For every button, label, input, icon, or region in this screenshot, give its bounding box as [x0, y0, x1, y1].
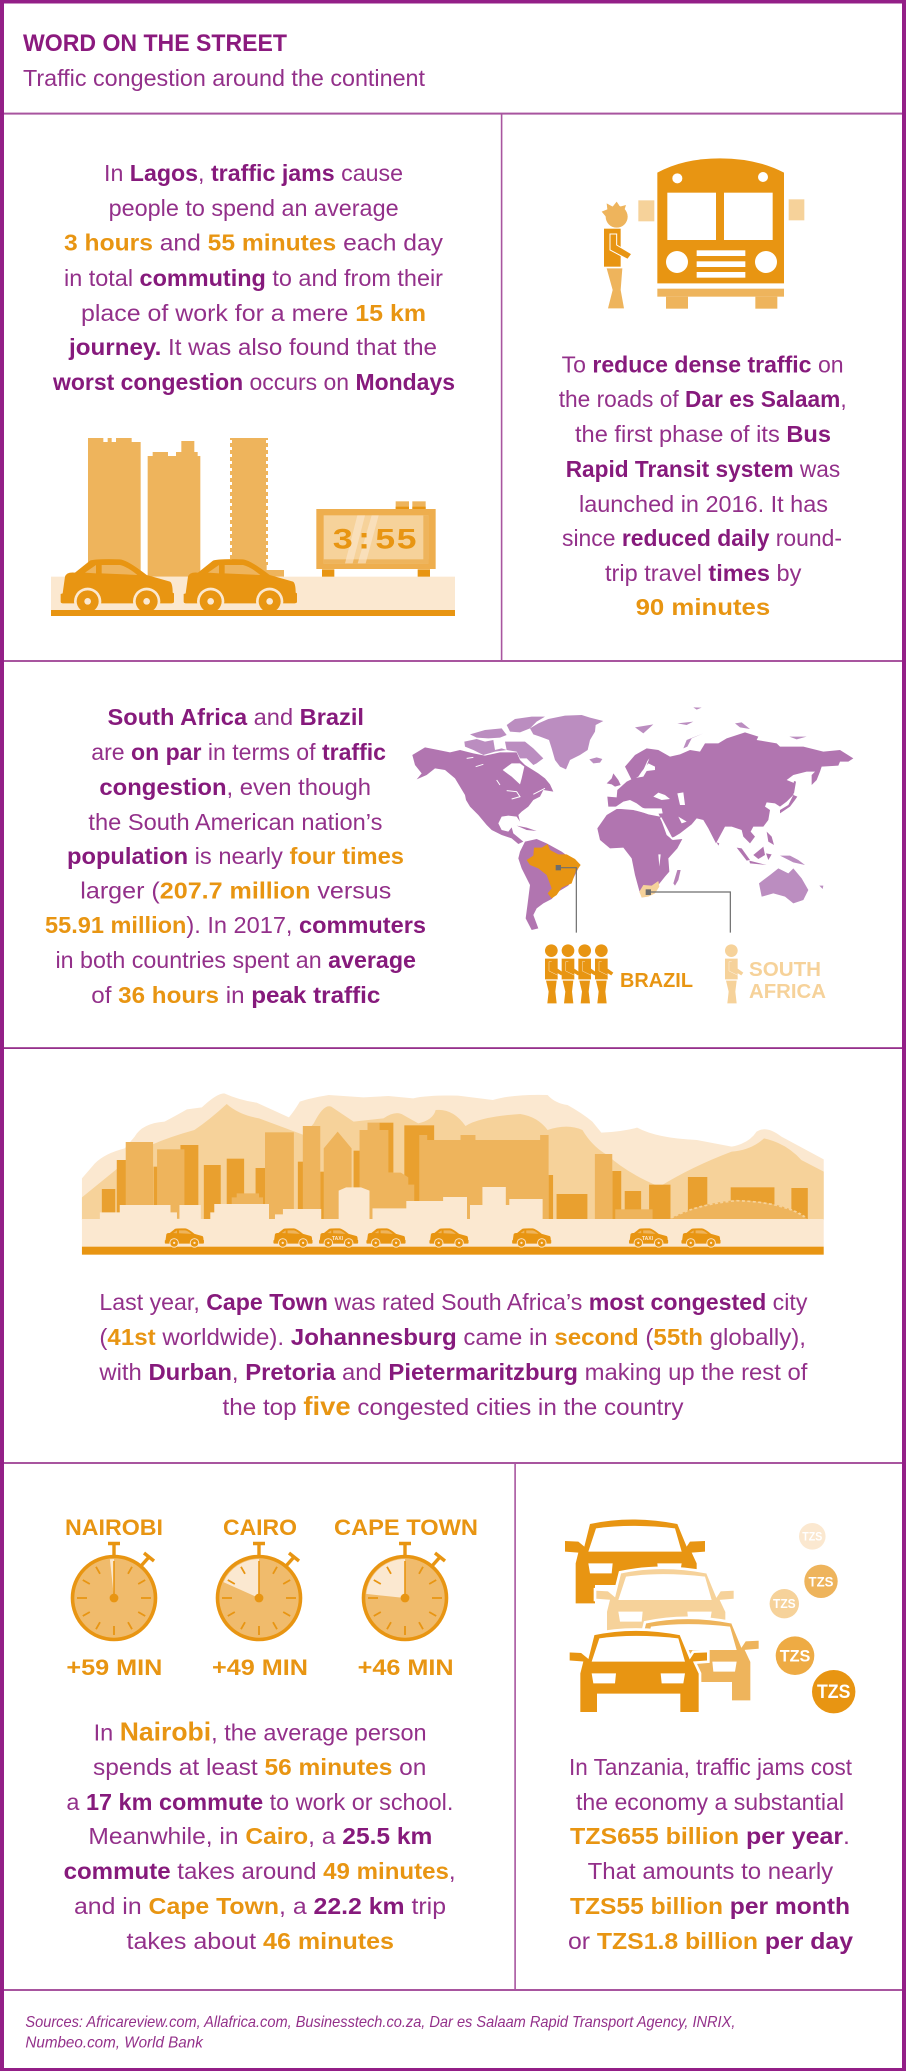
panel: Lagos — [51, 160, 455, 616]
text: on par: of 36 hours in peak traffic — [91, 982, 381, 1008]
text: commute comparison: Meanwhile, in Cairo, a 25.5 km — [88, 1823, 432, 1849]
stopwatch: Nairobi: NAIROBI — [65, 1515, 163, 1540]
icon: bus and commuter — [602, 158, 804, 309]
icon: TZS coins: TZS — [808, 1573, 834, 1589]
text: most congested cities — [98, 1289, 808, 1421]
text: bus rapid transit: Rapid Transit system was — [566, 456, 840, 482]
text: most congested cities: (41st worldwide). Johannesburg came in second (55th globally), — [99, 1324, 806, 1350]
text: commute comparison: takes about 46 minutes — [126, 1928, 394, 1954]
skyline traffic — [165, 1228, 721, 1248]
text: cost to economy: TZS55 billion per month — [570, 1893, 850, 1919]
stopwatch: Nairobi: +59 MIN — [66, 1655, 162, 1680]
illustration: Cape Town skyline — [82, 1093, 824, 1255]
text: on par: in both countries spent an average — [56, 947, 416, 973]
icon: TZS coins: TZS — [817, 1682, 850, 1703]
stopwatch: Cairo: +49 MIN — [212, 1655, 308, 1680]
chart: world map with callouts — [412, 707, 853, 1003]
sources — [25, 2014, 735, 2052]
panel: Cape Town — [82, 1093, 824, 1421]
text: bus rapid transit: since reduced daily round- — [562, 525, 842, 551]
text: Lagos commute: in total commuting to and from their — [64, 265, 443, 291]
map: the Americas — [412, 715, 603, 933]
text: commute comparison: commute takes around 49 minutes, — [64, 1858, 456, 1884]
text: Lagos commute: people to spend an average — [109, 195, 399, 221]
South Africa — [639, 881, 659, 898]
icon: traffic jam cars — [565, 1519, 760, 1713]
pictogram: South Africa population — [725, 944, 743, 1003]
text: on par: are on par in terms of traffic — [91, 739, 386, 765]
label: Brazil: BRAZIL — [620, 970, 693, 992]
illustration: city, cars and clock — [51, 438, 455, 616]
text: cost to economy: TZS655 billion per year . — [570, 1823, 850, 1849]
title: WORD ON THE STREET — [23, 30, 287, 57]
text: bus rapid transit: trip travel times by — [605, 560, 802, 586]
text: commute comparison: spends at least 56 minutes on — [93, 1754, 426, 1780]
text: most congested cities: Last year, Cape Town was rated South Africa’s most congested city — [99, 1289, 808, 1315]
pictogram: Brazil population — [545, 944, 613, 1003]
icon: TZS coins — [770, 1523, 855, 1713]
stopwatch: Nairobi — [65, 1515, 163, 1680]
text: Lagos commute — [52, 160, 455, 395]
text: most congested cities: the top five congested cities in the country — [222, 1391, 684, 1421]
text: on par: congestion, even though — [99, 774, 371, 800]
clock digits: 3:55 — [332, 525, 417, 558]
text: bus rapid transit: To reduce dense traffic on — [562, 352, 844, 378]
Brazil — [527, 844, 581, 898]
text: cost to economy: the economy a substantial — [576, 1789, 844, 1815]
icon: TZS coins: TZS — [773, 1597, 796, 1611]
text: on par: population is nearly four times — [67, 843, 404, 869]
stopwatch: Cape Town: +46 MIN — [358, 1655, 454, 1680]
stopwatch: Cape Town — [334, 1515, 478, 1680]
text: most congested cities: with Durban, Pretoria and Pietermaritzburg making up the rest of — [98, 1359, 808, 1385]
text: Lagos commute: In Lagos, traffic jams cause — [104, 160, 403, 186]
text: commute comparison: and in Cape Town , a 22.2 km trip — [74, 1893, 446, 1919]
stopwatch: Cairo — [212, 1515, 308, 1680]
text: on par: larger ( 207.7 million versus — [80, 878, 391, 904]
text: bus rapid transit — [559, 352, 847, 620]
map: Eurasia, Africa and Oceania — [597, 707, 853, 933]
subtitle: Traffic congestion around the continent — [23, 65, 426, 91]
icon: TZS coins: TZS — [780, 1647, 810, 1666]
label: South Africa: SOUTH — [749, 959, 821, 981]
text: commute comparison: In Nairobi, the average person — [94, 1717, 427, 1747]
text: bus rapid transit: the roads of Dar es Salaam, — [559, 386, 847, 412]
skyline traffic: TAXI — [332, 1236, 344, 1242]
text: on par: the South American nation’s — [88, 809, 382, 835]
text: cost to economy: In Tanzania, traffic jams cost — [569, 1754, 853, 1780]
text: bus rapid transit: the first phase of its Bus — [575, 421, 831, 447]
label: South Africa — [749, 959, 826, 1003]
skyline traffic: TAXI — [642, 1236, 654, 1242]
text: on par: South Africa and Brazil — [108, 704, 364, 730]
panel: stopwatches and commutes — [64, 1515, 478, 1954]
text: bus rapid transit: launched in 2016. It has — [579, 491, 828, 517]
text: Lagos commute: 3 hours and 55 minutes each day — [64, 230, 444, 256]
text: Lagos commute: place of work for a mere 15 km — [81, 300, 426, 326]
text: cost to economy: or TZS1.8 billion per day — [568, 1928, 853, 1954]
text: cost to economy: That amounts to nearly — [588, 1858, 834, 1884]
stopwatch: Cape Town: CAPE TOWN — [334, 1515, 478, 1540]
text: Lagos commute: worst congestion occurs on Mondays — [52, 369, 455, 395]
text: commute comparison — [64, 1717, 456, 1954]
icon: TZS coins: TZS — [802, 1532, 823, 1544]
label: South Africa: AFRICA — [749, 981, 826, 1003]
stopwatch: Cairo: CAIRO — [223, 1515, 297, 1540]
sources: Sources: Africareview.com, Allafrica.com, Businesstech.co.za, Dar es Salaam Rapid Transport Agency, INRIX, — [25, 2014, 735, 2031]
text: Lagos commute: journey. It was also found that the — [68, 334, 437, 360]
text: bus rapid transit: 90 minutes — [636, 594, 770, 620]
text: cost to economy — [568, 1754, 853, 1954]
panel: Tanzania — [565, 1519, 855, 1954]
text: on par — [45, 704, 426, 1008]
header panel — [23, 30, 426, 91]
text: commute comparison: a 17 km commute to work or school. — [66, 1789, 453, 1815]
panel: South Africa and Brazil — [45, 704, 853, 1008]
text: on par: 55.91 million). In 2017, commuters — [45, 912, 426, 938]
sources: Numbeo.com, World Bank — [25, 2035, 204, 2052]
panel: Dar es Salaam — [559, 158, 847, 620]
